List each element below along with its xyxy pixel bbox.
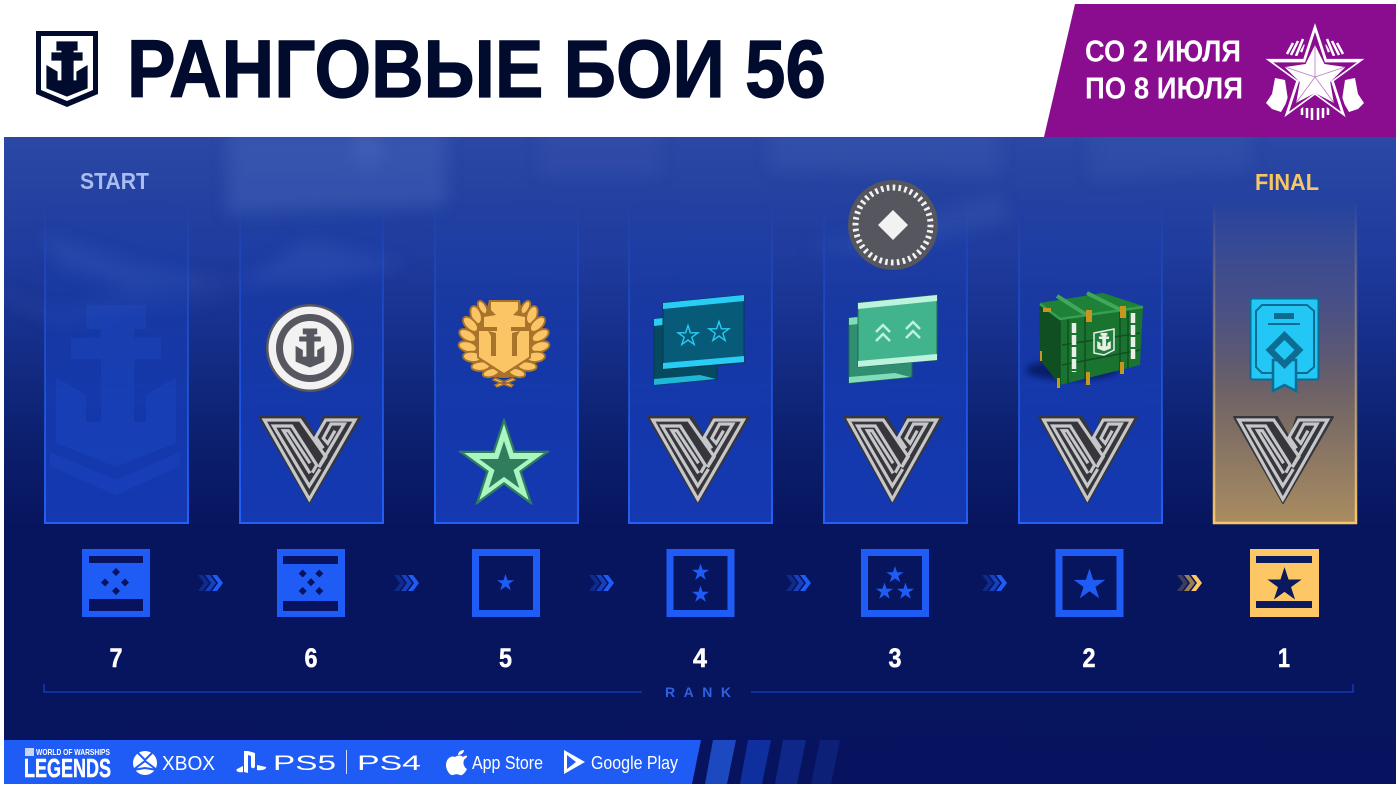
rank label: RANK [665,684,731,700]
icon: World of Warships shield logo [36,31,98,107]
icon: V rank insignia [260,417,360,503]
arrow 4 to 3 [786,575,811,591]
start label: START [80,168,150,194]
header bar [0,0,1400,137]
Legends logo: LEGENDS [24,753,111,783]
arrow 2 to 1 [1177,575,1202,591]
PlayStation: PS4 [357,752,422,775]
arrow 6 to 5 [394,575,419,591]
arrow 5 to 4 [589,575,614,591]
panel: platforms footer [4,740,840,784]
icon: green crate [1026,293,1143,388]
blurred ship background [60,137,994,286]
column 5 [435,200,578,523]
Legends logo [24,747,111,783]
PlayStation: PS5 [273,752,336,775]
date text: СО 2 ИЮЛЯ [1085,34,1241,68]
rank icon 7 [82,549,150,617]
rank numbers: 4 [693,643,707,673]
rank numbers: 2 [1082,643,1096,673]
App Store: App Store [472,753,543,773]
icon: diamond coin [848,180,938,270]
rank axis [44,684,1353,700]
icon: certificate [1250,298,1318,391]
column 1: final [1214,200,1356,523]
footer stripes [705,740,840,784]
rank numbers: 3 [888,643,902,673]
App Store [446,750,543,775]
icon: V rank insignia [1039,417,1137,503]
icon: green signal flag [849,295,937,383]
Google Play: Google Play [591,753,678,773]
icon: V rank insignia [1234,417,1333,503]
rank numbers: 6 [304,643,318,673]
icon: V rank insignia [648,417,749,503]
icon: gold laurel emblem [457,299,551,387]
column 2 [1019,200,1162,523]
rank icon 4 [670,552,731,614]
Xbox [133,751,215,775]
panel: date banner [1044,4,1396,137]
rank icon 3 [864,552,926,614]
rank numbers: 1 [1278,643,1290,673]
PlayStation [236,750,422,775]
rank numbers [110,643,1290,673]
Xbox: XBOX [162,753,215,775]
icon: green star [459,419,549,504]
arrow 3 to 2 [982,575,1007,591]
rank icon 6 [277,549,345,617]
date text [1085,34,1243,106]
column 3 [824,180,967,523]
title: РАНГОВЫЕ БОИ 56 [127,24,826,115]
icon: ranked star emblem [1265,22,1365,120]
rank icon 2 [1059,552,1120,614]
rank icon 5 [476,552,536,614]
column 7: start [45,200,188,523]
watermark shield [50,305,180,495]
rank icon 1 [1250,549,1319,617]
rank numbers: 5 [499,643,512,673]
column 6 [240,200,383,523]
rank numbers: 7 [110,643,122,673]
icon: V rank insignia [844,417,942,503]
icon: anchor coin [266,304,354,392]
final label: FINAL [1255,169,1319,195]
Google Play [564,750,678,774]
Legends logo: WORLD OF WARSHIPS [36,747,110,757]
date text: ПО 8 ИЮЛЯ [1085,70,1243,106]
column 4 [629,200,772,523]
arrow 7 to 6 [198,575,223,591]
icon: blue signal flag [654,295,744,385]
